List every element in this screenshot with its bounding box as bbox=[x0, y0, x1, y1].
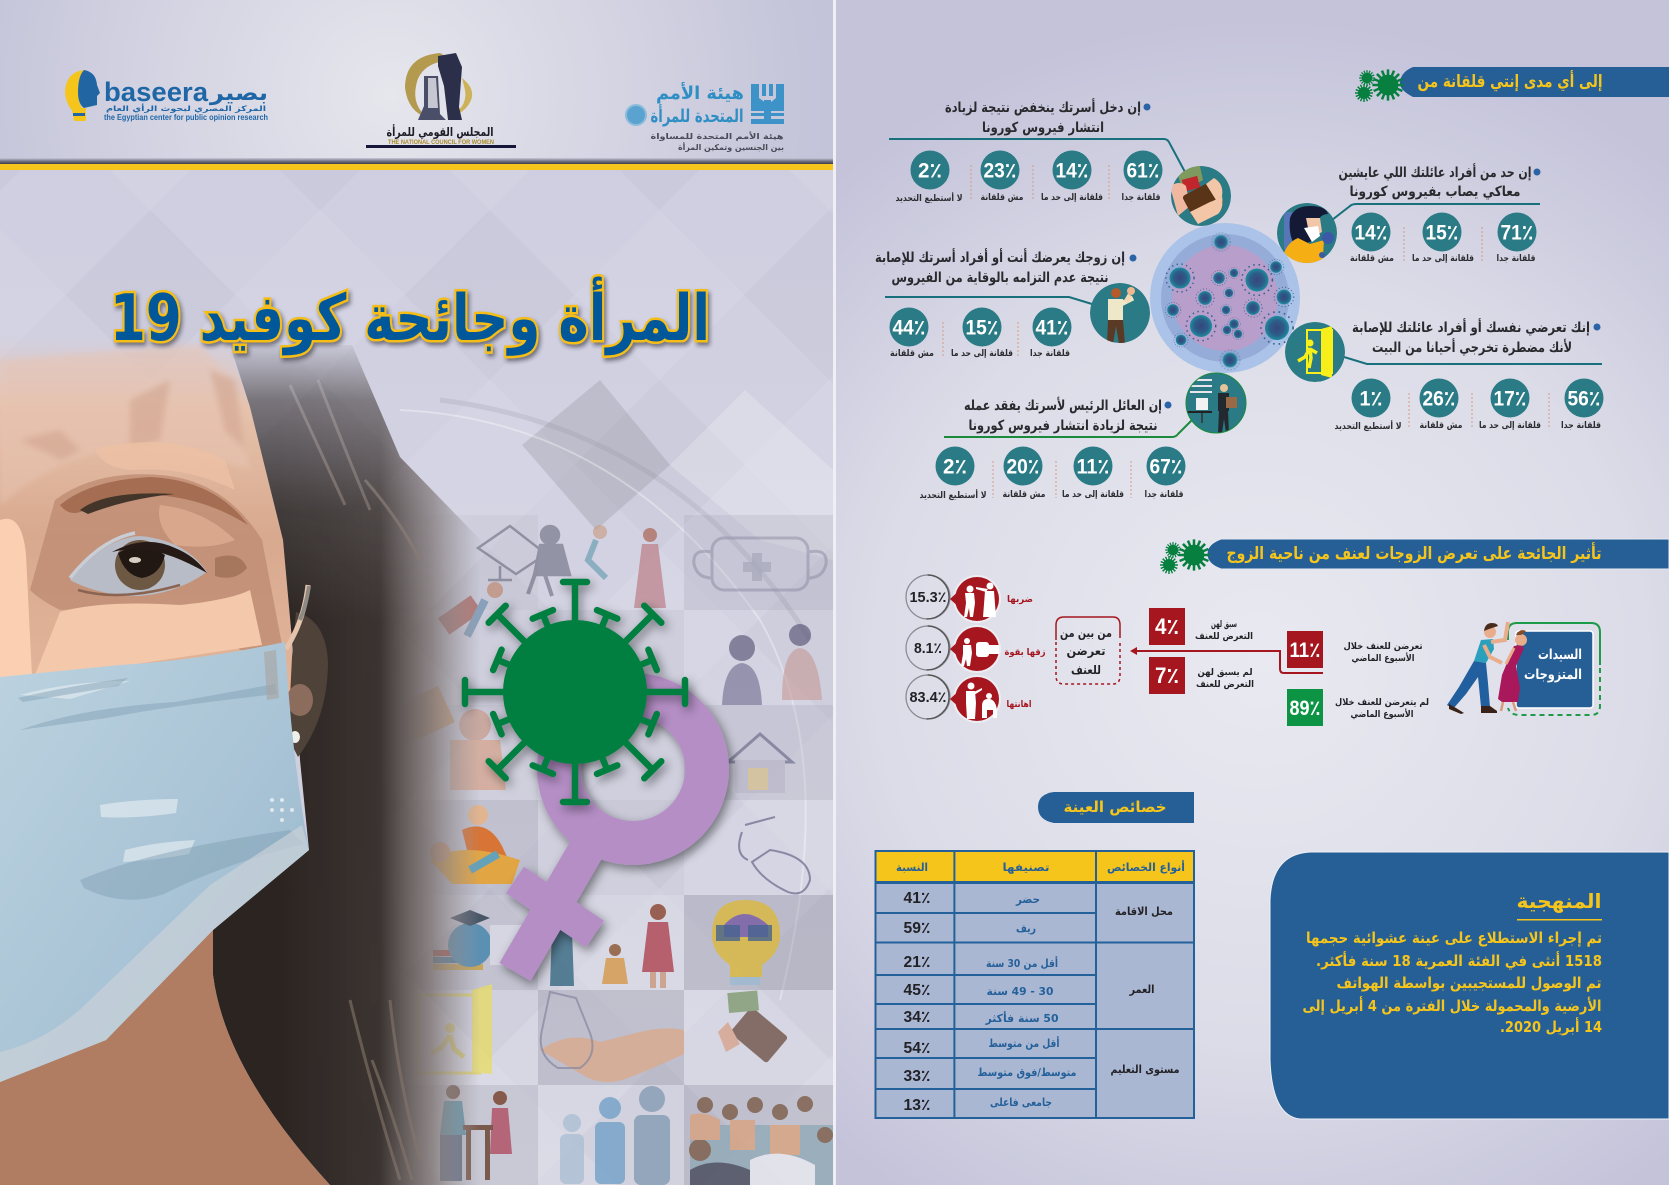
stat: 71% very worried bbox=[1496, 212, 1536, 264]
question text: إن زوجك يعرضك أنت أو أفراد أسرتك للإصابة bbox=[875, 248, 1125, 266]
panel: methodology bbox=[1270, 852, 1669, 1119]
stat: 11% exposed last week: الأسبوع الماضي bbox=[1352, 652, 1414, 664]
box: among those exposed to violence: للعنف bbox=[1071, 663, 1101, 677]
residence rows: ريف bbox=[1016, 922, 1036, 935]
age rows: 45٪ bbox=[904, 982, 930, 999]
illustration: face mask bbox=[0, 642, 309, 1082]
residence rows: 41٪ bbox=[904, 890, 930, 907]
logo: National Council for Women bbox=[366, 53, 516, 148]
question text: نتيجة لزيادة انتشار فيروس كورونا bbox=[968, 418, 1158, 434]
bullet bbox=[1534, 168, 1540, 176]
stat: 2% undetermined: 2٪ bbox=[943, 456, 967, 478]
stat: 17% somewhat: قلقانة إلى حد ما bbox=[1479, 421, 1541, 431]
education rows: مستوى التعليم bbox=[1110, 1063, 1180, 1076]
stat: 14% not worried: مش قلقانة bbox=[1350, 254, 1394, 264]
stat: 17% somewhat bbox=[1479, 378, 1541, 431]
stat: 1% undetermined: 1٪ bbox=[1360, 388, 1382, 410]
stat: 71% very worried: قلقانة جدا bbox=[1496, 254, 1536, 264]
table header: أنواع الخصائص bbox=[1107, 860, 1185, 874]
residence rows: 59٪ bbox=[904, 920, 930, 937]
box: among those exposed to violence bbox=[1056, 617, 1120, 684]
group: breadwinner job loss bbox=[920, 373, 1246, 501]
question text: إن العائل الرئيس لأسرتك يفقد عمله bbox=[964, 397, 1162, 414]
stat: 7% not previously exposed: 7٪ bbox=[1155, 663, 1179, 688]
education rows: جامعى فاعلى bbox=[990, 1096, 1052, 1109]
education rows bbox=[904, 1036, 1180, 1114]
age rows: أقل من 30 سنة bbox=[986, 956, 1058, 970]
stat: 89% not exposed last week: لم يتعرضن للعنف خلال bbox=[1335, 698, 1429, 708]
stat: 67% very worried: قلقانة جدا bbox=[1144, 490, 1184, 500]
education rows: أقل من متوسط bbox=[988, 1036, 1060, 1050]
icon: bulb head bbox=[65, 70, 100, 121]
bullet bbox=[1164, 402, 1172, 408]
icon: wallet bbox=[1170, 162, 1231, 226]
icon: exit door bbox=[1285, 322, 1345, 382]
heading: how worried bbox=[1355, 67, 1669, 102]
icon: UN Women mark bbox=[751, 84, 784, 124]
methodology text: تم إجراء الاستطلاع على عينة عشوائية حجمها bbox=[1306, 929, 1602, 947]
heading: pandemic impact on spousal violence bbox=[1160, 539, 1669, 574]
table header: تصنيفها bbox=[1002, 861, 1050, 874]
age rows: 50 سنة فأكثر bbox=[985, 1011, 1059, 1025]
residence rows: حضر bbox=[1015, 893, 1040, 906]
question text bbox=[875, 248, 1125, 286]
stat: 44% not worried bbox=[890, 308, 934, 359]
methodology text: تم الوصول للمستجيبين بواسطة الهواتف bbox=[1336, 974, 1602, 992]
stat: 23% not worried: مش قلقانة bbox=[980, 193, 1024, 203]
arrowhead bbox=[1130, 647, 1137, 655]
stat: 44% not worried: 44٪ bbox=[892, 316, 926, 340]
icon: UN emblem bbox=[626, 105, 646, 125]
heading: how worried: إلى أي مدى إنتي قلقانة من bbox=[1418, 70, 1602, 92]
residence rows: محل الاقامة bbox=[1115, 905, 1173, 918]
stat: 15% somewhat: قلقانة إلى حد ما bbox=[1412, 254, 1474, 264]
stat: 44% not worried: مش قلقانة bbox=[890, 349, 934, 359]
question text: إن حد من أفراد عائلتك اللي عايشين bbox=[1338, 163, 1532, 181]
stat: 7% not previously exposed bbox=[1149, 657, 1254, 694]
table header bbox=[876, 851, 1194, 882]
stat: 26% not worried bbox=[1420, 378, 1462, 431]
violence type: beating bbox=[906, 575, 1033, 623]
stat: 14% somewhat bbox=[1041, 150, 1103, 203]
icon: female symbol bbox=[515, 695, 707, 972]
header band bbox=[0, 0, 833, 170]
stat: 11% somewhat: قلقانة إلى حد ما bbox=[1062, 490, 1124, 500]
question text: نتيجة عدم التزامه بالوقاية من الفيروس bbox=[892, 270, 1108, 286]
stat: 41% very worried: قلقانة جدا bbox=[1030, 349, 1070, 359]
question text: لأنك مضطرة تخرجي أحيانا من البيت bbox=[1372, 338, 1572, 356]
box: among those exposed to violence: من بين من bbox=[1060, 626, 1112, 640]
stat: 20% not worried bbox=[1002, 446, 1046, 500]
logo: UN Women: هيئة الأمم المتحدة للمساواة bbox=[650, 131, 784, 141]
stat: 4% previously exposed: التعرض للعنف bbox=[1195, 632, 1253, 642]
question text: إنك تعرضي نفسك أو أفراد عائلتك للإصابة bbox=[1352, 318, 1590, 336]
logo: UN Women: هيئة الأمم bbox=[656, 82, 744, 104]
violence type: insulted: 83.4٪ bbox=[910, 689, 946, 706]
bullet bbox=[1130, 254, 1136, 262]
icon: coughing woman bbox=[1277, 203, 1337, 263]
bullet bbox=[1144, 104, 1150, 110]
stat: 1% undetermined bbox=[1334, 378, 1402, 432]
stat: 26% not worried: مش قلقانة bbox=[1420, 421, 1462, 431]
illustration: chin and neck bbox=[0, 930, 330, 1185]
stat: 2% undetermined bbox=[920, 446, 986, 501]
stat: 4% previously exposed: 4٪ bbox=[1155, 614, 1179, 639]
violence type: insulted bbox=[906, 675, 1032, 723]
violence type: beating: 15.3٪ bbox=[910, 589, 946, 606]
question text bbox=[1352, 318, 1590, 356]
age rows: 30 - 49 سنة bbox=[986, 985, 1054, 998]
residence rows bbox=[904, 890, 1173, 937]
question text: إن دخل أسرتك ينخفض نتيجة لزيادة bbox=[945, 98, 1141, 116]
logo: National Council for Women: THE NATIONAL COUNCIL FOR WOMEN bbox=[388, 140, 494, 146]
illustration: man pushing woman bbox=[1447, 622, 1527, 714]
illustration: hair bbox=[213, 345, 500, 1185]
age rows: العمر bbox=[1129, 983, 1154, 996]
stat: 26% not worried: 26٪ bbox=[1422, 388, 1456, 410]
stat: 15% somewhat: 15٪ bbox=[1426, 222, 1458, 244]
icon: gold ring and pharaonic statues bbox=[405, 53, 472, 120]
question text: انتشار فيروس كورونا bbox=[982, 120, 1104, 136]
stat: 67% very worried: 67٪ bbox=[1150, 456, 1182, 478]
illustration: ear and earring bbox=[286, 585, 328, 757]
logo: baseera: المركز المصري لبحوث الرأي العام bbox=[106, 103, 266, 113]
heading: sample characteristics bbox=[1038, 792, 1194, 823]
stat: 15% somewhat: قلقانة إلى حد ما bbox=[951, 349, 1013, 359]
stat: 71% very worried: 71٪ bbox=[1500, 222, 1534, 244]
education rows: 54٪ bbox=[904, 1040, 930, 1057]
stat: 1% undetermined: لا أستطيع التحديد bbox=[1334, 420, 1402, 432]
stat: 2% undetermined: 2٪ bbox=[918, 160, 942, 182]
age rows: 34٪ bbox=[904, 1009, 930, 1026]
question text bbox=[964, 397, 1162, 434]
stat: 4% previously exposed: سبق لهن bbox=[1211, 620, 1237, 630]
stat: 61% very worried: 61٪ bbox=[1126, 160, 1160, 182]
stat: 20% not worried: 20٪ bbox=[1006, 456, 1040, 478]
methodology text: 1518 أنثى في الفئة العمرية 18 سنة فأكثر. bbox=[1316, 951, 1602, 970]
heading: pandemic impact on spousal violence: تأثير الجائحة على تعرض الزوجات لعنف من ناحية الزوج bbox=[1226, 542, 1602, 564]
stat: 61% very worried bbox=[1122, 150, 1162, 203]
stat: 56% very worried: 56٪ bbox=[1568, 388, 1600, 410]
central virus bubble bbox=[1150, 223, 1300, 373]
stat: 11% somewhat: 11٪ bbox=[1076, 456, 1110, 478]
icon: fist pushing woman bbox=[961, 638, 999, 666]
group: household income bbox=[896, 98, 1231, 226]
question text: معاكي يصاب بفيروس كورونا bbox=[1350, 184, 1520, 200]
stat: 14% not worried bbox=[1350, 212, 1394, 264]
icon: man holding child bbox=[1090, 283, 1150, 344]
icon: virus cluster bbox=[1160, 539, 1210, 574]
heading: sample characteristics: خصائص العينة bbox=[1064, 798, 1166, 816]
illustration: woman's face bbox=[0, 335, 292, 700]
methodology text bbox=[1302, 929, 1602, 1036]
methodology heading: المنهجية bbox=[1516, 889, 1602, 913]
age rows bbox=[904, 954, 1154, 1026]
stat: 67% very worried bbox=[1144, 446, 1186, 500]
stat: 23% not worried: 23٪ bbox=[984, 160, 1016, 182]
violence type: shoved bbox=[906, 625, 1046, 673]
stat: 11% somewhat bbox=[1062, 446, 1124, 500]
stat: 20% not worried: مش قلقانة bbox=[1002, 490, 1046, 500]
stat: 56% very worried bbox=[1561, 378, 1604, 431]
education rows: 33٪ bbox=[904, 1068, 930, 1085]
logo: baseera: baseera bbox=[104, 77, 209, 107]
stat: 89% not exposed last week bbox=[1287, 689, 1429, 726]
box: among those exposed to violence: تعرضن bbox=[1066, 644, 1106, 658]
stat: 14% somewhat: قلقانة إلى حد ما bbox=[1041, 193, 1103, 203]
table: sample characteristics bbox=[875, 851, 1194, 1118]
group: family member infected bbox=[1277, 163, 1540, 272]
box: married women: المتزوجات bbox=[1524, 667, 1582, 683]
icon: green coronavirus bbox=[465, 582, 685, 802]
methodology text: الأرضية والمحمولة خلال الفترة من 4 أبريل إلى bbox=[1302, 996, 1602, 1015]
stat: 14% not worried: 14٪ bbox=[1354, 222, 1388, 244]
stat: 41% very worried: 41٪ bbox=[1036, 316, 1068, 340]
logo: National Council for Women: المجلس القومي للمرأة bbox=[386, 124, 494, 140]
icon: man striking woman bbox=[964, 582, 996, 617]
stat: 15% somewhat bbox=[1412, 212, 1474, 264]
logo: baseera: the Egyptian center for public opinion research bbox=[104, 113, 268, 122]
group: forced to leave home bbox=[1285, 318, 1604, 432]
box: married women bbox=[1508, 623, 1600, 715]
photo mosaic of survey themes bbox=[388, 515, 833, 1185]
stat: 11% exposed last week: تعرضن للعنف خلال bbox=[1344, 642, 1422, 652]
stat: 4% previously exposed bbox=[1149, 608, 1253, 645]
title: المرأة وجائحة كوفيد 19 bbox=[110, 276, 710, 356]
stat: 11% exposed last week bbox=[1287, 631, 1422, 668]
group: husband exposing family bbox=[875, 248, 1150, 359]
question text bbox=[945, 98, 1141, 136]
stat: 89% not exposed last week: الأسبوع الماضي bbox=[1350, 708, 1414, 720]
logo: UN Women: المتحدة للمرأة bbox=[650, 104, 744, 127]
eyebrow bbox=[60, 477, 248, 525]
panel: right page bbox=[836, 0, 1669, 1185]
icon: laid-off worker bbox=[1186, 373, 1246, 433]
violence type: shoved: 8.1٪ bbox=[914, 640, 942, 657]
stat: 2% undetermined bbox=[896, 150, 962, 204]
stat: 7% not previously exposed: التعرض للعنف bbox=[1196, 680, 1254, 690]
stat: 2% undetermined: لا أستطيع التحديد bbox=[896, 192, 962, 204]
icon: virus cluster bbox=[1355, 69, 1404, 102]
stat: 41% very worried bbox=[1030, 308, 1072, 359]
logo: baseera: بصير bbox=[209, 81, 268, 105]
stat: 7% not previously exposed: لم يسبق لهن bbox=[1198, 668, 1252, 678]
age rows: 21٪ bbox=[904, 954, 930, 971]
education rows: 13٪ bbox=[904, 1097, 930, 1114]
stat: 61% very worried: قلقانة جدا bbox=[1122, 193, 1161, 203]
stat: 56% very worried: قلقانة جدا bbox=[1561, 421, 1601, 431]
education rows: متوسط/فوق متوسط bbox=[978, 1066, 1076, 1079]
logo: UN Women bbox=[626, 82, 784, 152]
stat: 89% not exposed last week: 89٪ bbox=[1290, 697, 1320, 720]
icon: man shouting at crouching woman bbox=[966, 682, 997, 719]
violence type: beating: ضربها bbox=[1007, 595, 1033, 605]
violence type: shoved: زقها بقوة bbox=[1004, 648, 1046, 658]
methodology text: 14 أبريل 2020. bbox=[1500, 1017, 1602, 1036]
box: married women: السيدات bbox=[1538, 647, 1582, 663]
arrow: from 11% to box bbox=[1132, 651, 1323, 673]
question text bbox=[1338, 163, 1532, 200]
bullet bbox=[1594, 324, 1600, 330]
stat: 11% exposed last week: 11٪ bbox=[1290, 639, 1320, 662]
table header: النسبة bbox=[896, 861, 928, 874]
eye bbox=[70, 533, 207, 596]
panel: left cover page bbox=[0, 0, 836, 1185]
stat: 14% somewhat: 14٪ bbox=[1056, 160, 1088, 182]
logo: baseera bbox=[65, 70, 268, 122]
stat: 2% undetermined: لا أستطيع التحديد bbox=[920, 489, 986, 501]
connector lines bbox=[885, 139, 1602, 437]
stat: 23% not worried bbox=[980, 150, 1024, 203]
stat: 15% somewhat: 15٪ bbox=[966, 316, 998, 340]
stat: 15% somewhat bbox=[951, 308, 1013, 359]
violence type: insulted: اهانتها bbox=[1006, 700, 1032, 710]
logo: UN Women: بين الجنسين وتمكين المرأة bbox=[678, 142, 784, 152]
stat: 17% somewhat: 17٪ bbox=[1494, 388, 1526, 410]
